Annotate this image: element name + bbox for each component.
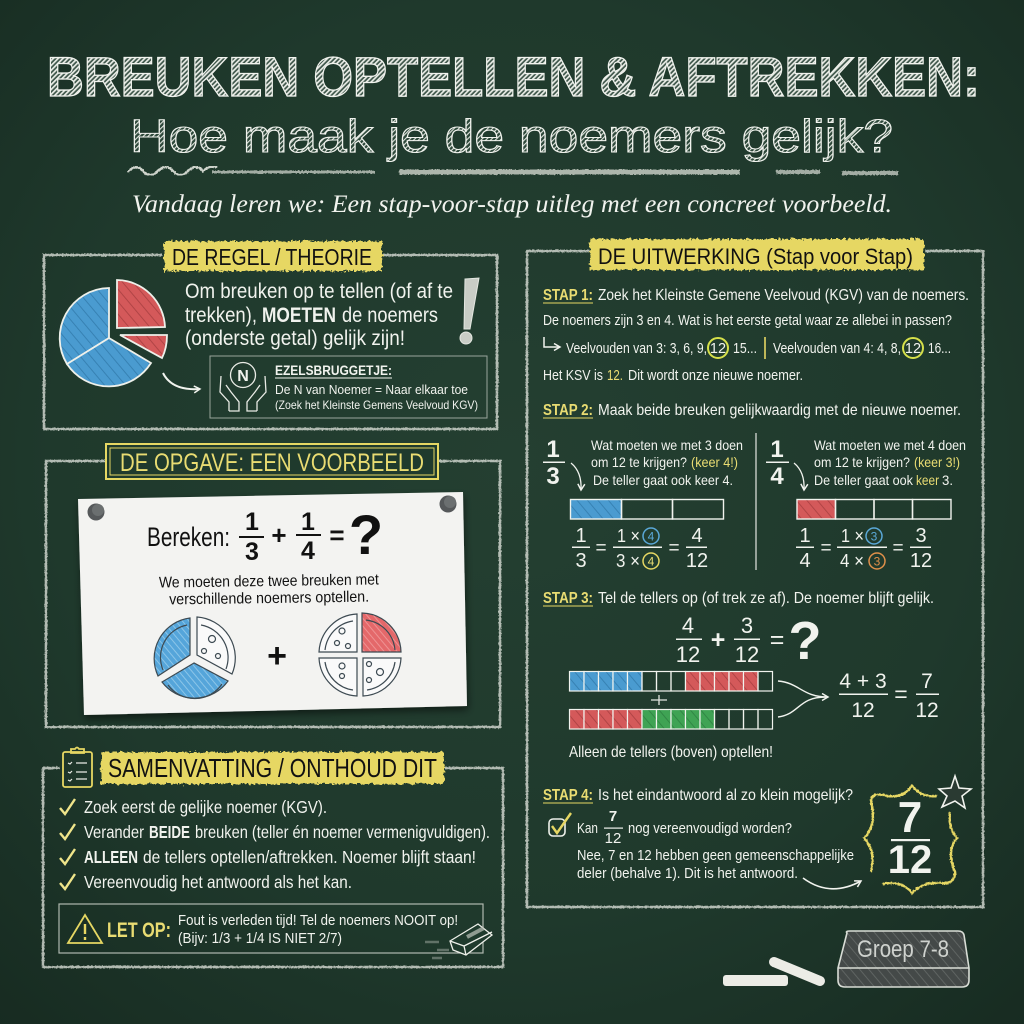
step 4: Nee, 7 en 12 hebben geen gemeenschappelijke xyxy=(577,848,854,864)
left: one third: 3 xyxy=(546,463,560,490)
heading tag: DE OPGAVE: EEN VOORBEELD xyxy=(120,449,424,477)
title: Hoe maak je de noemers gelijk? xyxy=(130,110,893,162)
right: one quarter: 3. xyxy=(942,472,953,488)
step 2 xyxy=(543,402,966,572)
bar: red and green xyxy=(570,710,772,729)
checklist: Verander xyxy=(84,822,144,842)
step 2: Maak beide breuken gelijkwaardig met de nieuwe noemer. xyxy=(598,402,961,419)
icon: clipboard xyxy=(63,748,92,787)
equation: 4 xyxy=(691,525,703,547)
step 1: Zoek het Kleinste Gemene Veelvoud (KGV) van de noemers. xyxy=(598,287,969,304)
left: one third xyxy=(543,436,743,572)
rule text: trekken), xyxy=(185,304,257,327)
left: one third: om 12 te krijgen? xyxy=(591,454,687,470)
panel: de opgave xyxy=(46,444,500,727)
answer frame: 7 xyxy=(898,793,922,842)
title underline xyxy=(128,166,898,175)
panel frame xyxy=(44,255,497,429)
equation: = xyxy=(820,538,832,559)
left: one third: (keer 4!) xyxy=(691,454,738,470)
checklist: Vereenvoudig het antwoord als het kan. xyxy=(84,872,352,892)
equation xyxy=(676,611,822,671)
arrow to answer xyxy=(803,878,861,889)
pizza: one quarter shaded xyxy=(319,613,401,696)
mnemonic box: (Zoek het Kleinste Gemens Veelvoud KGV) xyxy=(275,398,478,412)
rule text: MOETEN xyxy=(262,304,336,327)
icon: star xyxy=(939,776,971,808)
panel frame xyxy=(43,768,503,967)
step 4: Kan xyxy=(577,821,598,837)
pin right xyxy=(440,496,456,512)
explanation: verschillende noemers optellen. xyxy=(169,589,369,608)
step 1: Het KSV is xyxy=(543,368,603,384)
step 3 xyxy=(543,590,939,761)
mnemonic box xyxy=(210,356,487,418)
equation: 3 xyxy=(741,613,753,638)
check items xyxy=(60,799,75,889)
step 3: Alleen de tellers (boven) optellen! xyxy=(569,744,773,761)
left: one third: Wat moeten we met 3 doen xyxy=(591,437,743,453)
step 1 xyxy=(543,287,969,384)
pin left xyxy=(88,504,104,520)
panel frame xyxy=(46,461,500,727)
highlighted 12 xyxy=(903,338,923,358)
checklist: breuken (teller én noemer vermenigvuldigen). xyxy=(195,822,490,842)
right: one quarter: (keer 3!) xyxy=(914,454,960,470)
small plus mark xyxy=(651,695,667,705)
equation: 1 xyxy=(799,525,811,547)
icon: eraser xyxy=(425,924,492,958)
checklist: ALLEEN xyxy=(84,847,138,867)
equation: 3 xyxy=(245,538,259,566)
pizza: one third shaded twice xyxy=(154,617,235,699)
explanation: We moeten deze twee breuken met xyxy=(159,571,380,592)
equation: 4 xyxy=(682,613,694,638)
step 1: Dit wordt onze nieuwe noemer. xyxy=(628,368,803,384)
step 4: Is het eindantwoord al zo klein mogelijk? xyxy=(598,787,853,804)
step 4: deler (behalve 1). Dit is het antwoord. xyxy=(577,866,798,882)
equation: 1 xyxy=(245,508,259,536)
step 4: STAP 4: xyxy=(543,787,593,804)
equation: = xyxy=(770,626,784,654)
right: one quarter: keer xyxy=(916,472,939,488)
step 1: Veelvouden van 4: 4, 8, xyxy=(773,341,901,357)
mnemonic box: EZELSBRUGGETJE: xyxy=(275,363,392,378)
equation: 1 × xyxy=(617,526,640,546)
panel: samenvatting xyxy=(43,748,503,967)
right: one quarter: De teller gaat ook xyxy=(814,472,914,488)
step 4: 12 xyxy=(605,830,621,847)
equation xyxy=(147,503,383,566)
right: one quarter: om 12 te krijgen? xyxy=(814,454,910,470)
equation: 3 xyxy=(915,525,927,547)
result equation: 12 xyxy=(851,699,875,722)
icon: warning triangle xyxy=(68,915,102,943)
equation: = xyxy=(892,538,904,559)
checklist: BEIDE xyxy=(149,822,190,842)
arrow xyxy=(544,337,560,347)
rule text: Om breuken op te tellen (of af te xyxy=(185,280,453,303)
equation: 4 × xyxy=(840,551,864,571)
rule text xyxy=(185,280,453,350)
chalk pieces xyxy=(723,962,820,986)
step 2: STAP 2: xyxy=(543,402,593,419)
equation: 12 xyxy=(735,642,759,667)
equation: 4 xyxy=(648,554,655,568)
equation: 3 xyxy=(575,550,587,572)
panel frame xyxy=(527,251,983,907)
highlighted 12: 12 xyxy=(710,341,726,357)
arrow to mnemonic xyxy=(163,373,200,389)
result equation: = xyxy=(894,681,908,707)
equation: 3 xyxy=(871,530,878,544)
rule text: (onderste getal) gelijk zijn! xyxy=(185,327,405,350)
equation: 4 xyxy=(301,537,315,565)
right: one quarter: 1 xyxy=(770,436,784,463)
equation: 4 xyxy=(799,550,811,572)
equation: 1 × xyxy=(841,526,864,546)
bar: blue and red xyxy=(570,672,772,691)
step 4: 7 xyxy=(609,808,617,825)
result equation: 4 + 3 xyxy=(839,670,887,693)
equation: + xyxy=(271,520,287,550)
mnemonic box: De N van Noemer = Naar elkaar toe xyxy=(275,382,468,397)
equation: 3 xyxy=(874,554,881,568)
plus sign: + xyxy=(267,637,287,675)
title xyxy=(47,45,980,162)
equation: ? xyxy=(788,611,822,671)
fraction bar quarters xyxy=(797,500,951,519)
equation: Bereken: xyxy=(147,522,230,552)
equation: + xyxy=(711,626,725,654)
panel: de uitwerking xyxy=(527,239,983,907)
step 1: 15... xyxy=(733,341,757,357)
equation: 12 xyxy=(676,642,700,667)
chalk tray line xyxy=(44,987,982,989)
explanation xyxy=(159,571,380,609)
warning box: LET OP: xyxy=(107,919,171,942)
equation: 3 × xyxy=(616,551,640,571)
equation: 4 xyxy=(648,530,655,544)
warning box: (Bijv: 1/3 + 1/4 IS NIET 2/7) xyxy=(178,931,342,947)
icon: exclamation mark xyxy=(460,278,479,344)
rule text: de noemers xyxy=(342,304,438,327)
highlighted 12 xyxy=(708,338,728,358)
warning box: Fout is verleden tijd! Tel de noemers NOOIT op! xyxy=(178,913,458,929)
left: one third: De teller gaat ook keer 4. xyxy=(593,472,733,488)
step 3: Tel de tellers op (of trek ze af). De noemer blijft gelijk. xyxy=(598,590,934,607)
left: one third: 1 xyxy=(546,436,560,463)
answer frame xyxy=(864,786,957,893)
mnemonic box: N xyxy=(237,368,249,385)
icon: hands holding N xyxy=(220,362,266,411)
equation xyxy=(796,525,932,572)
right: one quarter xyxy=(766,436,966,572)
equation: ? xyxy=(349,503,383,566)
right: one quarter: 4 xyxy=(770,463,784,490)
checklist: Zoek eerst de gelijke noemer (KGV). xyxy=(84,797,327,817)
highlighted 12: 12 xyxy=(905,341,921,357)
equation: 1 xyxy=(301,508,315,536)
equation: 12 xyxy=(910,550,932,572)
equation: 12 xyxy=(686,550,708,572)
step 1: De noemers zijn 3 en 4. Wat is het eerste getal waar ze allebei in passen? xyxy=(543,313,952,329)
result equation xyxy=(839,670,939,722)
equation: = xyxy=(329,520,345,550)
eraser with group label xyxy=(838,931,969,987)
right: one quarter: Wat moeten we met 4 doen xyxy=(814,437,966,453)
equation: = xyxy=(595,538,607,559)
paper note xyxy=(78,492,467,715)
heading tag: SAMENVATTING / ONTHOUD DIT xyxy=(108,753,437,783)
subtitle: Vandaag leren we: Een stap-voor-stap uitleg met een concreet voorbeeld. xyxy=(132,191,892,218)
icon: checkbox xyxy=(549,813,571,836)
fraction bar thirds xyxy=(570,500,724,519)
pie chart xyxy=(60,280,167,386)
heading tag: DE UITWERKING (Stap voor Stap) xyxy=(598,244,913,269)
result equation: 12 xyxy=(915,699,939,722)
step 4 xyxy=(543,776,971,893)
eraser with group label: Groep 7-8 xyxy=(857,936,949,963)
step 1: STAP 1: xyxy=(543,287,593,304)
checklist xyxy=(60,797,490,892)
heading tag xyxy=(106,444,438,479)
result equation: 7 xyxy=(921,670,933,693)
warning box xyxy=(59,904,492,958)
step 4: nog vereenvoudigd worden? xyxy=(628,821,792,837)
equation xyxy=(572,525,708,572)
checklist: de tellers optellen/aftrekken. Noemer blijft staan! xyxy=(143,847,476,867)
step 1: 16... xyxy=(928,341,951,357)
merging arrows xyxy=(778,681,828,717)
panel: de regel / theorie xyxy=(44,241,497,429)
step 3: STAP 3: xyxy=(543,590,593,607)
step 1: 12. xyxy=(607,368,623,384)
answer frame: 12 xyxy=(888,838,932,882)
step 1: Veelvouden van 3: 3, 6, 9, xyxy=(566,341,707,357)
equation: = xyxy=(668,538,680,559)
equation: 1 xyxy=(575,525,587,547)
heading tag: DE REGEL / THEORIE xyxy=(172,244,372,270)
